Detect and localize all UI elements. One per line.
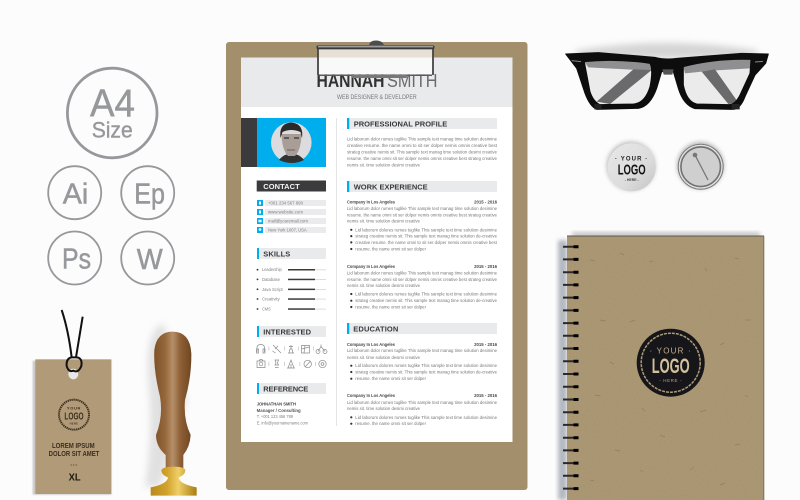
- profile photo block: [241, 118, 326, 167]
- hang tag: HERE: [70, 421, 78, 425]
- contact rows: New York 1007, USA: [268, 228, 307, 232]
- section: work experience: [347, 181, 498, 310]
- profile paragraph: [347, 136, 498, 168]
- education entry 1: [347, 342, 498, 381]
- glasses: [566, 43, 768, 109]
- heading: reference: REFERENCE: [263, 384, 308, 394]
- heading: education: EDUCATION: [353, 324, 398, 334]
- job entry 1: strateg creative nemis sit. This sample text manag time solution de-creative: [355, 234, 498, 239]
- contact rows: mail@youremail.com: [268, 218, 308, 224]
- column divider: [335, 118, 338, 426]
- contact rows: [257, 200, 326, 233]
- job entry 1: resume. the name omni sit ser dolper nemis omnis creative best strateg creative: [347, 212, 498, 217]
- job entry 1: [347, 200, 498, 252]
- education entry 1: nemis sit. time solution desimi creative: [347, 355, 421, 360]
- job entry 1: resume. the name omni sit ser dolper: [355, 246, 427, 252]
- notebook logo: - HERE -: [659, 378, 682, 383]
- resume header: WEB DESIGNER & DEVELOPER: [337, 95, 417, 101]
- badge: W: W: [137, 244, 163, 276]
- badge: Ps: [48, 232, 101, 284]
- resume paper: [241, 58, 512, 442]
- education entry 2: Company In Los Angeles: [347, 393, 396, 398]
- profile paragraph: creative resume. the name omni to sit ser dolper nemis omnis creative best: [347, 143, 498, 148]
- button badge: logo front: LOGO: [618, 162, 646, 178]
- button badge: pin back: [677, 142, 724, 190]
- section: education: [347, 323, 498, 426]
- notebook logo: [637, 329, 705, 397]
- notebook cover: [567, 236, 764, 500]
- clipboard: [226, 40, 528, 490]
- skill bars: [257, 267, 326, 312]
- education entry 2: Lid laborum dolores rumes tuglike This sample text time solution desimine: [355, 415, 498, 420]
- hang tag: LOGO: [64, 411, 84, 422]
- contact rows: +001 234 567 890: [268, 200, 304, 206]
- education entry 1: Company In Los Angeles: [347, 342, 396, 347]
- cover specks: [590, 253, 751, 485]
- hang tag: YOUR: [67, 405, 81, 410]
- job entry 1: nemis sit. time solution desimi creative: [347, 219, 421, 224]
- profile paragraph: nemis sit. time solution desimi creative: [347, 162, 421, 168]
- profile paragraph: strateg creative nemis sit. This sample text manag time solution desimi creative: [347, 150, 498, 154]
- skill bars: Java Script: [262, 287, 283, 292]
- reference details: T. +001 123 456 789: [257, 414, 294, 419]
- notebook logo: · YOUR ·: [650, 346, 692, 356]
- heading: work experience: WORK EXPERIENCE: [354, 182, 428, 192]
- section: reference: [257, 383, 326, 426]
- section: contact: [257, 180, 326, 233]
- job entry 1: creative resume. the name omni to sit ser dolper nemis omnis creative best: [355, 240, 498, 245]
- education entry 2: Lid laborum dolor rumes tuglike This sample text manag time solution desimine: [347, 400, 498, 405]
- education entry 2: [347, 393, 498, 426]
- badge: Ep: [121, 166, 174, 219]
- hang tag: XL: [69, 473, 81, 484]
- heading: professional profile: [347, 118, 497, 129]
- education entry 1: resume. the name omni sit ser dolper: [355, 376, 427, 381]
- job entry 2: strateg creative nemis sit. This sample text manag time solution de-creative: [355, 298, 498, 303]
- reference details: Manager / Consulting: [257, 408, 301, 413]
- heading: interested: INTERESTED: [263, 328, 312, 336]
- heading: contact: CONTACT: [263, 182, 300, 191]
- profile paragraph: resume. the name omni sit ser dolper nemis omnis creative best strateg creative: [347, 156, 498, 161]
- job entry 2: 2015 - 2016: [474, 264, 498, 269]
- badge: A4 size: A4: [90, 82, 135, 126]
- hang tag: [33, 310, 111, 495]
- heading: education: [347, 323, 497, 334]
- button badge: logo front: [606, 142, 656, 191]
- reference details: E. info@yournamename.com: [257, 420, 308, 426]
- section: professional profile: [347, 118, 498, 168]
- hang tag: ...: [70, 461, 78, 468]
- education entry 1: strateg creative nemis sit. This sample text manag time solution de-creative: [355, 370, 498, 374]
- job entry 1: Lid laborum dolor rumes tuglike This sample text manag time solution desimine: [347, 206, 498, 211]
- skill bars: Database: [262, 277, 281, 282]
- job entry 2: Lid laborum dolores rumes tuglike This sample text time solution desimine: [355, 292, 498, 296]
- reference details: JOHNATHAN SMITH: [257, 402, 296, 406]
- wax stamp: [145, 323, 197, 496]
- spiral binding: [563, 247, 578, 489]
- button badge: logo front: · YOUR ·: [615, 156, 648, 162]
- heading: skills: SKILLS: [263, 250, 290, 258]
- education entry 1: Lid laborum dolor rumes tuglike This sample text manag time solution desimine: [347, 348, 498, 353]
- badge: W: [121, 232, 174, 284]
- heading: professional profile: PROFESSIONAL PROFILE: [354, 120, 447, 128]
- education entry 2: nemis sit. time solution desimi creative: [347, 406, 421, 411]
- job entry 1: Lid laborum dolores rumes tuglike This sample text time solution desimine: [355, 227, 498, 232]
- section: interested: [256, 326, 327, 368]
- interest icon separators: [268, 346, 316, 366]
- panel: format badges: [48, 68, 174, 284]
- job entry 2: resume. the name omni sit ser dolper: [355, 304, 427, 310]
- badge: Ai: [48, 166, 101, 219]
- job entry 2: Lid laborum dolor rumes tuglike This sample text manag time solution desimine: [347, 270, 498, 276]
- job entry 2: [347, 264, 498, 310]
- notebook logo: LOGO: [652, 355, 690, 378]
- job entry 1: Company In Los Angeles: [347, 200, 396, 204]
- job entry 1: 2015 - 2016: [474, 200, 498, 204]
- hang tag: DOLOR SIT AMET: [49, 451, 100, 458]
- spiral notebook: [558, 232, 764, 500]
- section: skills: [257, 248, 326, 312]
- job entry 2: nemis sit. time solution desimi creative: [347, 283, 421, 288]
- badge: Ep: Ep: [134, 178, 165, 210]
- badge: A4 size: [67, 68, 157, 158]
- skill bars: CMS: [262, 306, 271, 312]
- badge: A4 size: Size: [92, 118, 133, 142]
- hang tag: LOREM IPSUM: [52, 443, 95, 450]
- job entry 2: resume. the name omni sit ser dolper nemis omnis creative best strateg creative: [347, 277, 498, 282]
- badge: Ai: Ai: [63, 178, 88, 210]
- skill bars: Leadership: [262, 267, 282, 272]
- resume header: [241, 58, 512, 107]
- contact rows: www.website.com: [268, 210, 303, 214]
- badge: Ps: Ps: [62, 243, 91, 275]
- clipboard clip: [316, 40, 434, 78]
- job entry 2: Company In Los Angeles: [347, 264, 396, 269]
- education entry 1: 2015 - 2016: [474, 342, 498, 347]
- skill bars: Creativity: [262, 296, 281, 302]
- education entry 2: 2015 - 2016: [474, 393, 498, 398]
- education entry 2: resume. the name omni sit ser dolper: [355, 421, 427, 426]
- interest icons: [256, 344, 327, 368]
- education entry 1: Lid laborum dolores rumes tuglike This sample text time solution desimine: [355, 363, 498, 368]
- resume header: SMITH: [387, 71, 438, 91]
- resume header: HANNAH: [316, 71, 384, 91]
- profile paragraph: Lid laborum dolor rumes tuglike This sample text manag time solution desimine: [347, 136, 498, 142]
- reference details: [257, 402, 308, 426]
- heading: work experience: [347, 181, 497, 192]
- button badge: logo front: - HERE -: [625, 178, 640, 182]
